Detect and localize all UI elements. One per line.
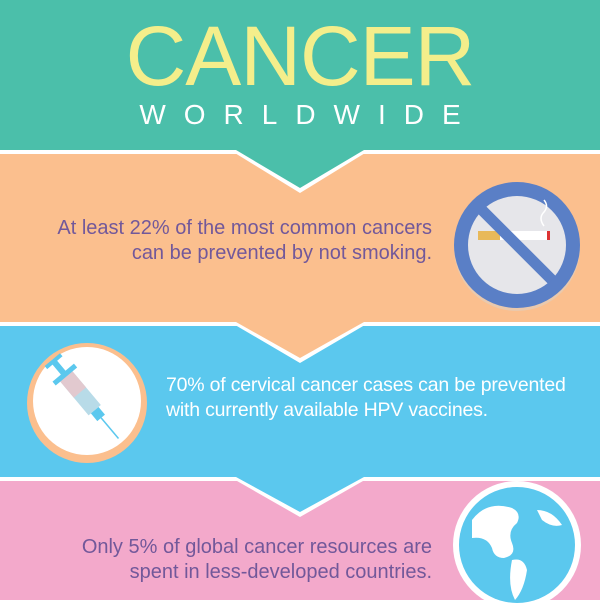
text: HPV: with currently available HPV vaccines. <box>166 399 488 421</box>
icon: no smoking <box>454 182 580 311</box>
text: resources: Only 5% of global cancer resources are <box>82 536 432 558</box>
icon: globe <box>453 481 581 603</box>
text: HPV: 70% of cervical cancer cases can be prevented <box>166 374 566 396</box>
text: smoking: At least 22% of the most common cancers <box>57 217 432 239</box>
text: resources: spent in less-developed countries. <box>130 561 432 583</box>
text: HPV <box>166 374 566 421</box>
text: smoking <box>57 217 432 264</box>
text: smoking: can be prevented by not smoking. <box>132 242 432 264</box>
title: WORLDWIDE <box>139 99 479 130</box>
icon: syringe <box>27 343 147 463</box>
title: CANCER <box>126 9 474 103</box>
text: resources <box>82 536 432 583</box>
